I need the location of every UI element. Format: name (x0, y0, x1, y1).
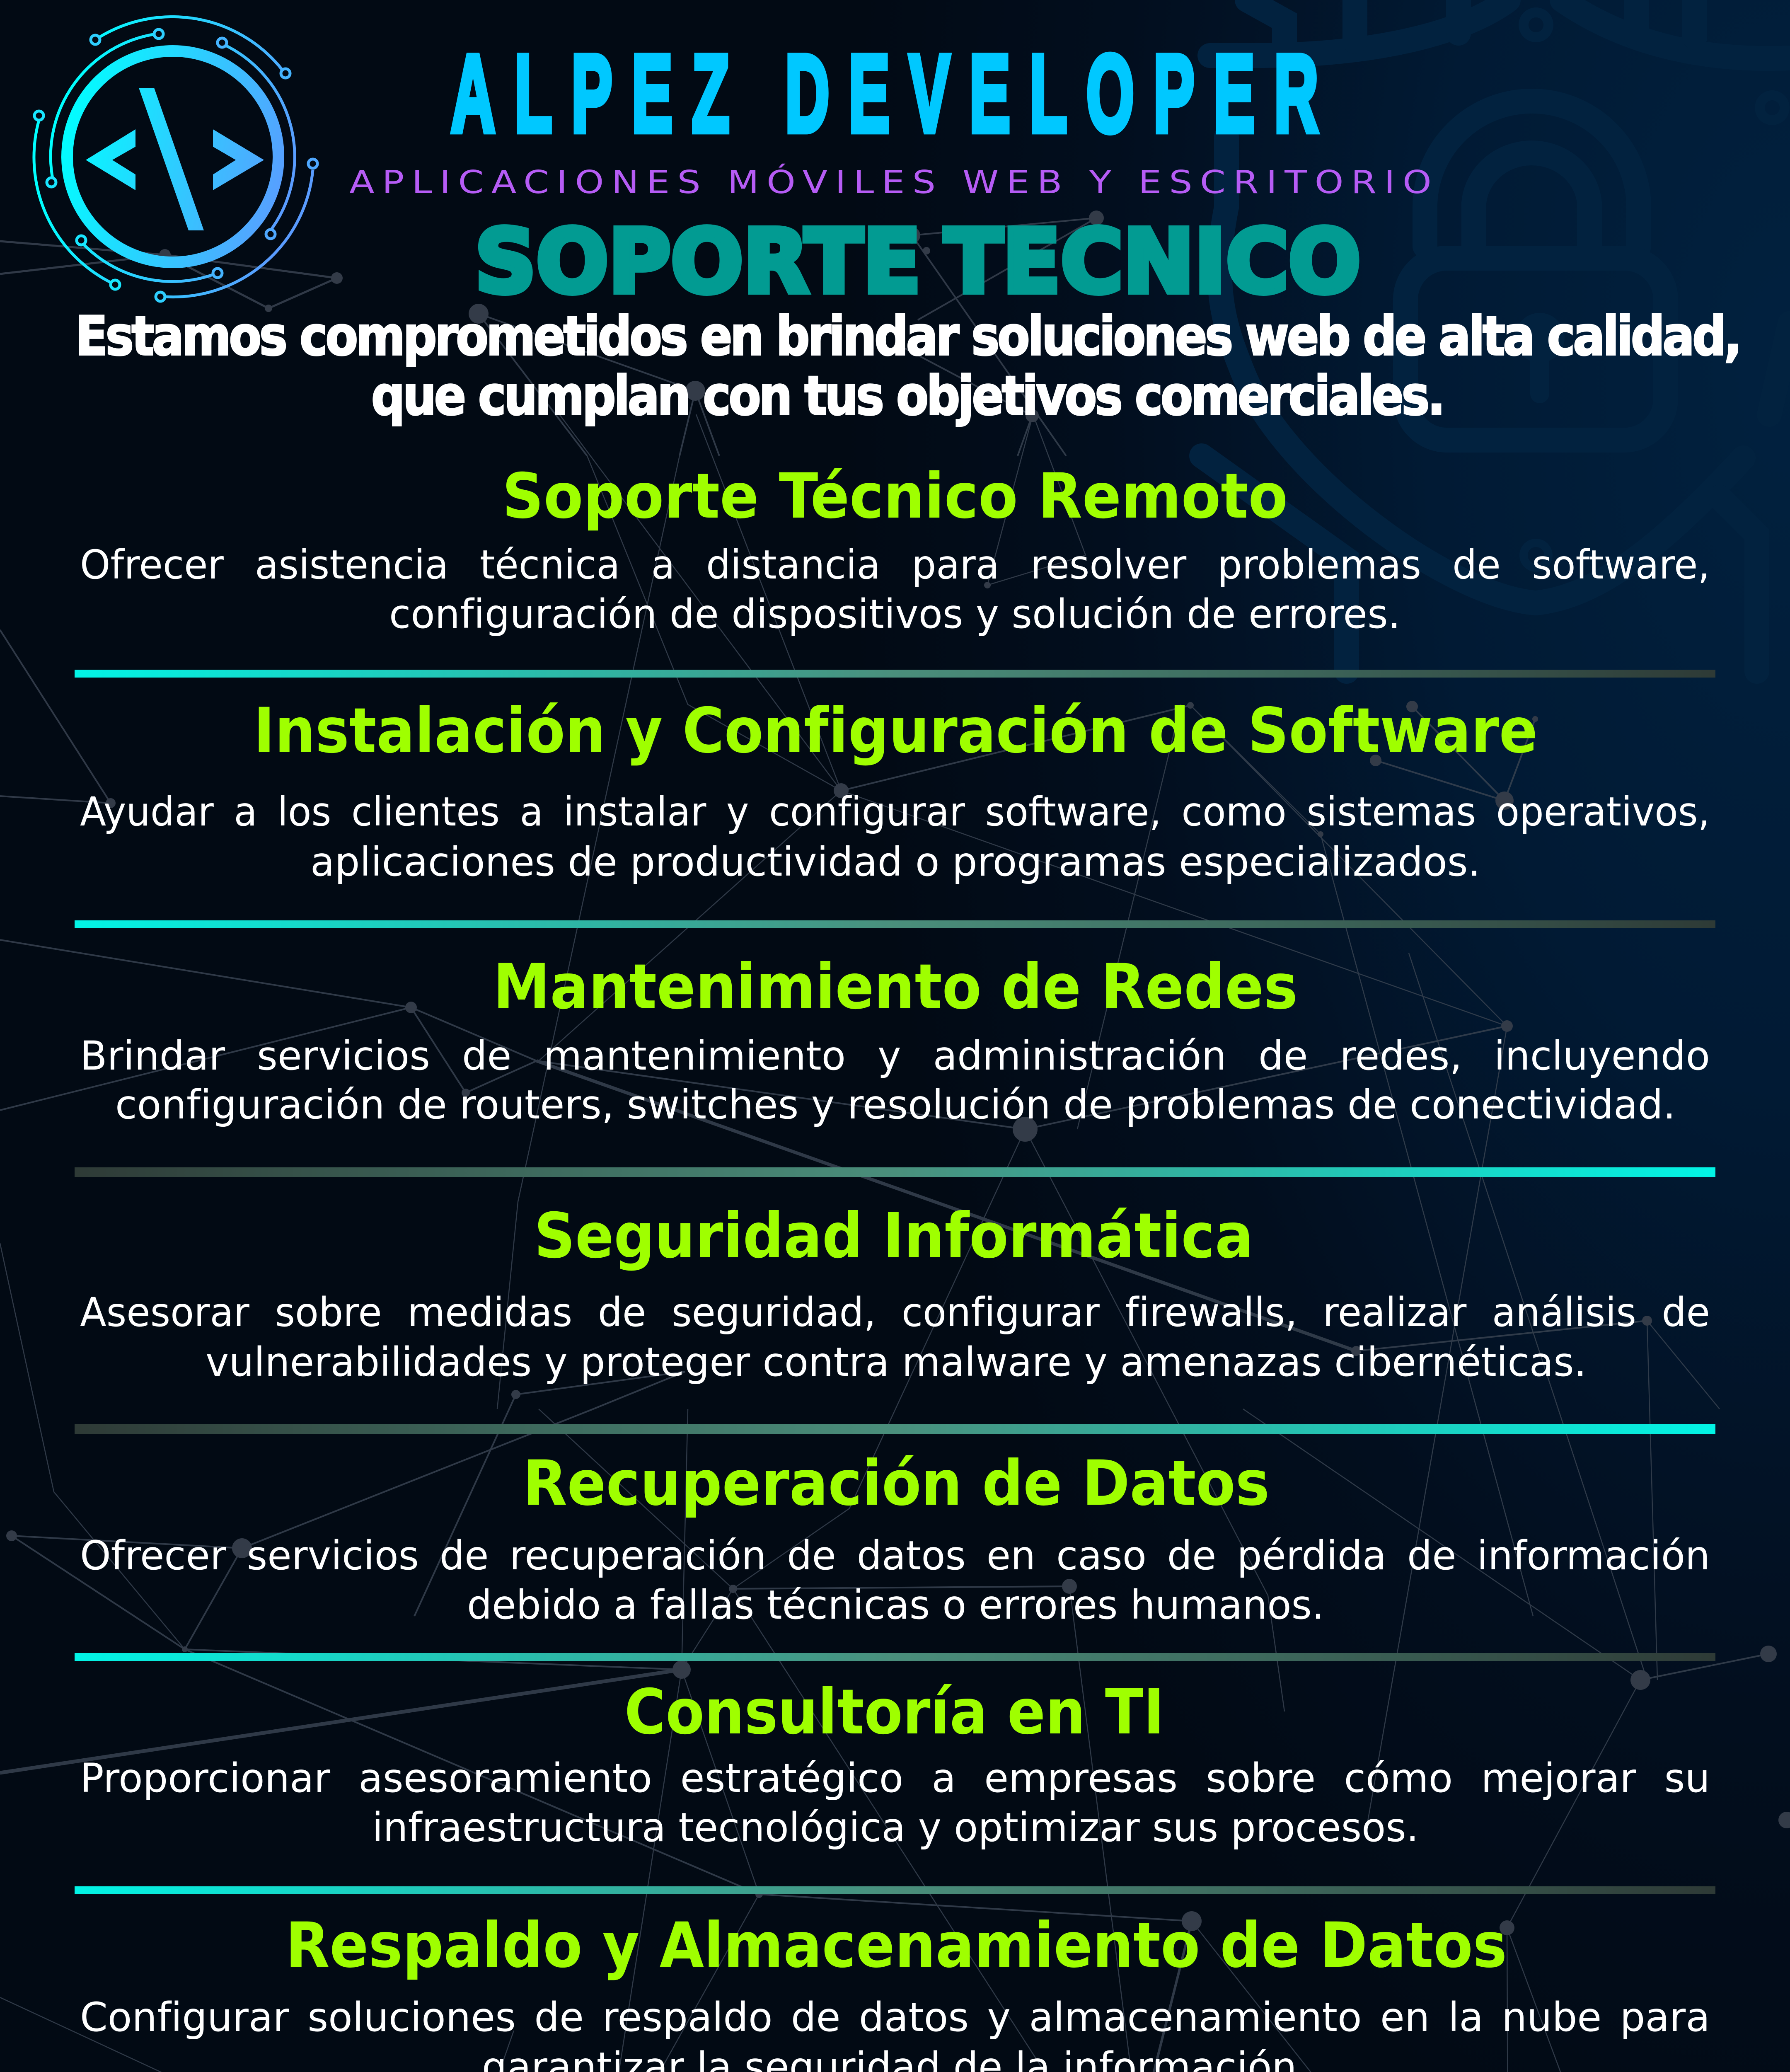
section: consultoria en TI: Consultoría en TI (624, 1676, 1164, 1748)
section: seguridad informatica (75, 1200, 1715, 1434)
section: consultoria en TI: infraestructura tecnológica y optimizar sus procesos. (372, 1804, 1419, 1851)
subtitle: APLICACIONES MÓVILES WEB Y ESCRITORIO (349, 163, 1432, 201)
logo circuit nodes (34, 29, 317, 301)
section: respaldo y almacenamiento de datos (75, 1910, 1715, 2072)
section: consultoria en TI (75, 1676, 1715, 1894)
section: consultoria en TI: Proporcionar asesoramiento estratégico a empresas sobre cómo mejorar su (80, 1755, 1710, 1801)
section: instalacion y configuracion de software (75, 695, 1715, 928)
title: ALPEZ DEVELOPER (451, 32, 1318, 155)
section: recuperacion de datos: Recuperación de Datos (523, 1447, 1270, 1520)
logo circuit arcs (34, 17, 313, 297)
section: respaldo y almacenamiento de datos: Respaldo y Almacenamiento de Datos (285, 1910, 1507, 1982)
section: soporte tecnico remoto: configuración de dispositivos y solución de errores. (389, 591, 1401, 637)
section: recuperacion de datos: debido a fallas técnicas o errores humanos. (467, 1582, 1324, 1628)
section: mantenimiento de redes: configuración de routers, switches y resolución de problemas de conectividad. (115, 1082, 1676, 1128)
section: instalacion y configuracion de software: Ayudar a los clientes a instalar y configurar software, como sistemas operativos, (80, 789, 1710, 835)
logo code symbol (86, 88, 264, 230)
section: soporte tecnico remoto: Soporte Técnico Remoto (502, 460, 1288, 533)
section: mantenimiento de redes: Brindar servicios de mantenimiento y administración de redes, incluyendo (80, 1033, 1710, 1079)
section: mantenimiento de redes: Mantenimiento de Redes (493, 951, 1298, 1023)
section: mantenimiento de redes (75, 951, 1715, 1177)
section: instalacion y configuracion de software: aplicaciones de productividad o programas especializados. (310, 839, 1480, 885)
section: recuperacion de datos: Ofrecer servicios de recuperación de datos en caso de pérdida de información (80, 1532, 1710, 1579)
section: recuperacion de datos (75, 1447, 1715, 1661)
heading: soporte tecnico: SOPORTE TECNICO (475, 211, 1361, 312)
section: soporte tecnico remoto: Ofrecer asistencia técnica a distancia para resolver problemas de software, (80, 542, 1710, 588)
section: respaldo y almacenamiento de datos: Configurar soluciones de respaldo de datos y almacenamiento en la nube para (80, 1994, 1710, 2041)
section: seguridad informatica: Asesorar sobre medidas de seguridad, configurar firewalls, realizar análisis de (80, 1289, 1710, 1336)
section: seguridad informatica: Seguridad Informática (534, 1200, 1253, 1272)
watermark padlock (1202, 0, 1790, 671)
tagline (75, 305, 1740, 427)
logo (34, 17, 317, 301)
section: instalacion y configuracion de software: Instalación y Configuración de Software (254, 695, 1538, 767)
section: seguridad informatica: vulnerabilidades y proteger contra malware y amenazas cibernéticas. (206, 1339, 1587, 1385)
section: soporte tecnico remoto (75, 460, 1715, 678)
tagline: que cumplan con tus objetivos comerciales. (371, 364, 1443, 427)
logo thick ring (67, 51, 278, 262)
